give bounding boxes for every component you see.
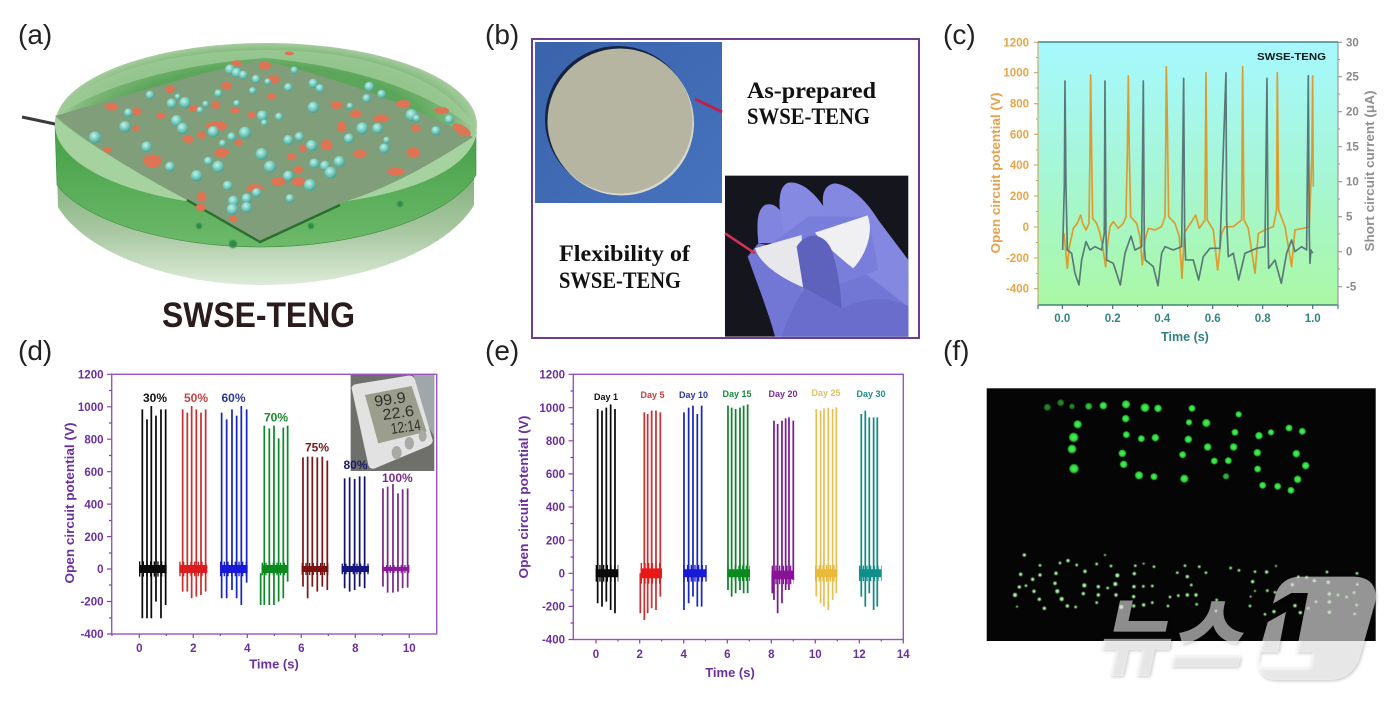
y tick labels: 1200 <box>539 370 565 382</box>
background paper <box>413 375 434 437</box>
y tick labels: 600 <box>84 467 104 479</box>
x tick labels: 6 <box>298 643 305 655</box>
right tick labels: 25 <box>1346 72 1359 84</box>
thumb <box>797 236 842 313</box>
left tick labels <box>1003 37 1029 296</box>
band day 10 <box>683 561 707 585</box>
ripple day 10 <box>683 548 707 598</box>
watermark: News1 logo <box>1102 576 1378 682</box>
palm <box>748 243 908 337</box>
clock reading: 12:14 <box>390 417 422 438</box>
watermark text: 뉴스 <box>1090 571 1262 693</box>
series 100% <box>383 484 408 593</box>
sheet right <box>815 215 870 268</box>
bottom disc layer <box>57 170 474 285</box>
KOREA LED dots <box>1013 553 1359 616</box>
finger left <box>757 204 792 243</box>
x tick labels: 0 <box>136 643 143 655</box>
y tick labels: 200 <box>84 532 104 544</box>
x tick labels: 14 <box>897 649 910 661</box>
ripple day 1 <box>596 548 618 598</box>
x tick labels: 2 <box>636 649 643 661</box>
sheet left <box>755 235 803 287</box>
x tick labels: 0.2 <box>1105 313 1121 325</box>
right tick labels: 30 <box>1346 37 1359 49</box>
band 80% <box>342 560 369 578</box>
x tick labels: 0.6 <box>1205 313 1221 325</box>
y tick labels <box>539 370 565 647</box>
x axis title: Time (s) <box>249 656 299 672</box>
panel a: SWSE-TENG disc illustration <box>22 43 477 285</box>
ripple 80% <box>342 553 369 585</box>
right tick labels: 10 <box>1346 177 1359 189</box>
dark green specks <box>196 201 403 248</box>
series day 15 <box>728 404 748 597</box>
rim highlight <box>55 50 477 132</box>
y tick labels: 400 <box>84 499 104 511</box>
plot frame <box>573 374 903 640</box>
ripple 60% <box>220 547 248 591</box>
ripple 30% <box>139 546 167 592</box>
ripple day 20 <box>772 547 794 603</box>
panel c: dual-axis time series <box>989 37 1377 344</box>
ripple 50% <box>179 547 207 591</box>
band day 5 <box>641 558 662 588</box>
band day 25 <box>815 561 837 585</box>
y tick labels: 0 <box>97 564 104 576</box>
ripple 75% <box>302 551 328 587</box>
series 60% <box>222 406 247 605</box>
x tick labels: 12 <box>853 649 866 661</box>
ripple day 25 <box>815 548 837 598</box>
TENG LED dots <box>1044 399 1310 494</box>
series labels <box>594 388 886 402</box>
series day 1 <box>598 404 615 613</box>
wire <box>695 99 722 112</box>
series labels: Day 20 <box>768 389 798 399</box>
x tick labels <box>136 643 416 655</box>
series labels: 75% <box>305 440 329 454</box>
series labels: Day 30 <box>856 389 886 399</box>
y tick labels: 200 <box>546 535 565 547</box>
series labels: 80% <box>344 458 368 472</box>
left tick labels: 1000 <box>1003 68 1029 80</box>
series day 10 <box>684 406 702 610</box>
y axis title: Open circuit potential (V) <box>516 416 531 578</box>
series labels: Day 5 <box>640 390 665 400</box>
y tick labels: 1000 <box>78 402 104 414</box>
right axis title: Short circuit current (μA) <box>1363 90 1377 252</box>
series labels: 70% <box>264 410 288 424</box>
back of hand <box>772 217 878 297</box>
label (a): (a) <box>18 19 52 50</box>
series 75% <box>303 457 327 598</box>
y tick labels: 1000 <box>539 403 565 415</box>
panel f: LED photo <box>987 388 1376 641</box>
x tick labels: 1.0 <box>1305 313 1321 325</box>
top disc face <box>55 43 477 207</box>
y tick labels: 1200 <box>78 370 104 382</box>
x tick labels: 10 <box>403 643 416 655</box>
x tick labels <box>593 649 910 661</box>
panel d: humidity chart <box>62 370 437 672</box>
ripple day 5 <box>641 542 662 604</box>
series 30% <box>142 406 166 618</box>
sheet fold edge <box>187 200 340 242</box>
readings <box>373 389 422 438</box>
front rim highlight <box>55 118 477 207</box>
panel e: stability chart <box>516 370 910 680</box>
temperature reading: 22.6 <box>381 403 415 424</box>
band day 30 <box>859 561 882 585</box>
text: swse-teng: SWSE-TENG <box>747 104 870 129</box>
caption: SWSE-TENG: SWSE-TENG <box>162 296 355 335</box>
series day 25 <box>816 407 836 610</box>
frame <box>532 39 919 338</box>
finger middle <box>779 182 833 243</box>
right axis <box>1338 42 1342 305</box>
left tick labels: -400 <box>1006 284 1029 296</box>
screen <box>365 386 427 443</box>
left tick labels: 800 <box>1010 99 1029 111</box>
right tick labels: 20 <box>1346 107 1359 119</box>
series labels: Day 25 <box>812 388 841 398</box>
series labels: Day 15 <box>722 389 752 399</box>
y tick labels: -200 <box>80 597 104 609</box>
y tick labels: 600 <box>546 469 565 481</box>
series labels: 50% <box>184 391 208 405</box>
band 30% <box>139 557 167 581</box>
ticks <box>107 374 409 638</box>
finger right <box>823 183 908 307</box>
band day 1 <box>596 561 618 585</box>
x tick labels: 0.0 <box>1054 313 1070 325</box>
y tick labels: 0 <box>559 568 565 580</box>
y tick labels: -200 <box>542 602 565 614</box>
disc edge <box>549 50 694 196</box>
series day 30 <box>861 411 877 610</box>
orange voltage trace <box>1064 67 1313 278</box>
device body <box>352 376 433 469</box>
watermark badge with numeral 1 <box>1257 577 1376 680</box>
photo: flexed disc in gloved hand <box>725 176 908 337</box>
x tick labels: 2 <box>190 643 197 655</box>
ripple day 15 <box>727 550 750 596</box>
series 70% <box>261 426 288 605</box>
inset photo: hygrometer <box>351 375 434 471</box>
y tick labels: 800 <box>546 436 565 448</box>
teal particles <box>89 64 454 215</box>
right tick labels: -5 <box>1346 282 1357 294</box>
x tick labels: 8 <box>352 643 359 655</box>
x tick labels: 10 <box>809 649 822 661</box>
series labels: Day 1 <box>594 392 618 402</box>
disc shadow <box>545 46 691 192</box>
right tick labels <box>1346 37 1359 294</box>
left tick labels: 1200 <box>1003 37 1029 49</box>
lower palm <box>782 288 908 337</box>
plot frame <box>112 374 437 634</box>
series labels: Day 10 <box>679 390 708 400</box>
gray current trace <box>1063 73 1313 286</box>
band 75% <box>302 560 328 578</box>
ripple 100% <box>382 557 409 581</box>
left tick labels: 400 <box>1010 160 1029 172</box>
series labels: 30% <box>143 391 167 405</box>
legend label: SWSE-TENG <box>1257 51 1326 63</box>
left tick labels: -200 <box>1006 253 1029 265</box>
label (f): (f) <box>943 335 969 366</box>
photo background <box>987 388 1376 641</box>
x tick labels: 4 <box>244 643 251 655</box>
ticks <box>568 374 903 644</box>
label (c): (c) <box>943 19 976 50</box>
photo: as-prepared disc <box>535 42 722 203</box>
axes frame <box>1038 42 1338 305</box>
band day 15 <box>727 561 750 585</box>
panel b: photo frame <box>532 39 919 338</box>
plot background <box>1038 42 1338 305</box>
wire <box>22 117 55 124</box>
band 100% <box>382 562 409 575</box>
left tick labels: 600 <box>1010 129 1029 141</box>
x axis title: Time (s) <box>1161 330 1209 344</box>
left tick labels: 200 <box>1010 191 1029 203</box>
y tick labels: 800 <box>84 434 104 446</box>
y tick labels: -400 <box>80 629 104 641</box>
humidity reading: 99.9 <box>373 389 407 411</box>
y tick labels: -400 <box>542 635 565 647</box>
series day 5 <box>640 411 660 620</box>
wire <box>725 233 755 253</box>
x axis title: Time (s) <box>705 665 755 680</box>
series labels: 60% <box>222 391 246 405</box>
right tick labels: 5 <box>1346 212 1353 224</box>
x tick labels: 4 <box>680 649 687 661</box>
right tick labels: 0 <box>1346 247 1352 259</box>
x tick labels: 0.4 <box>1154 313 1171 325</box>
band 70% <box>262 557 288 581</box>
x tick labels: 0.8 <box>1255 313 1271 325</box>
data series <box>139 406 409 618</box>
series 80% <box>345 476 365 592</box>
label (e): (e) <box>485 335 519 366</box>
left axis title: Open circuit potential (V) <box>989 92 1003 254</box>
y tick labels: 400 <box>546 502 565 514</box>
left axis <box>1034 42 1038 305</box>
middle disc layer <box>55 125 476 247</box>
series labels: 100% <box>382 471 413 485</box>
band 50% <box>179 557 207 581</box>
ripple 70% <box>262 550 288 588</box>
text: flexibility of: Flexibility of <box>559 241 690 266</box>
x tick labels: 0 <box>593 649 599 661</box>
x tick labels: 6 <box>724 649 731 661</box>
x tick labels: 8 <box>768 649 775 661</box>
left tick labels: 0 <box>1023 222 1029 234</box>
text: swse-teng: SWSE-TENG <box>559 268 681 293</box>
label (d): (d) <box>18 335 52 366</box>
buttons <box>392 430 427 459</box>
label (b): (b) <box>485 19 519 50</box>
series 50% <box>183 406 206 598</box>
y axis title: Open circuit potential (V) <box>62 422 77 584</box>
x tick labels <box>1054 313 1321 325</box>
bottom ticks <box>1038 305 1338 309</box>
series day 20 <box>772 417 793 613</box>
disc face <box>548 48 692 194</box>
ripple day 30 <box>859 550 882 596</box>
orange particles <box>103 51 473 222</box>
inner membrane sheet <box>55 60 473 242</box>
text: as-prepared: As-prepared <box>747 78 876 103</box>
band day 20 <box>772 562 794 588</box>
band 60% <box>220 557 248 581</box>
right tick labels: 15 <box>1346 142 1359 154</box>
series labels <box>143 391 413 485</box>
y tick labels <box>78 370 104 641</box>
data series <box>596 404 882 620</box>
